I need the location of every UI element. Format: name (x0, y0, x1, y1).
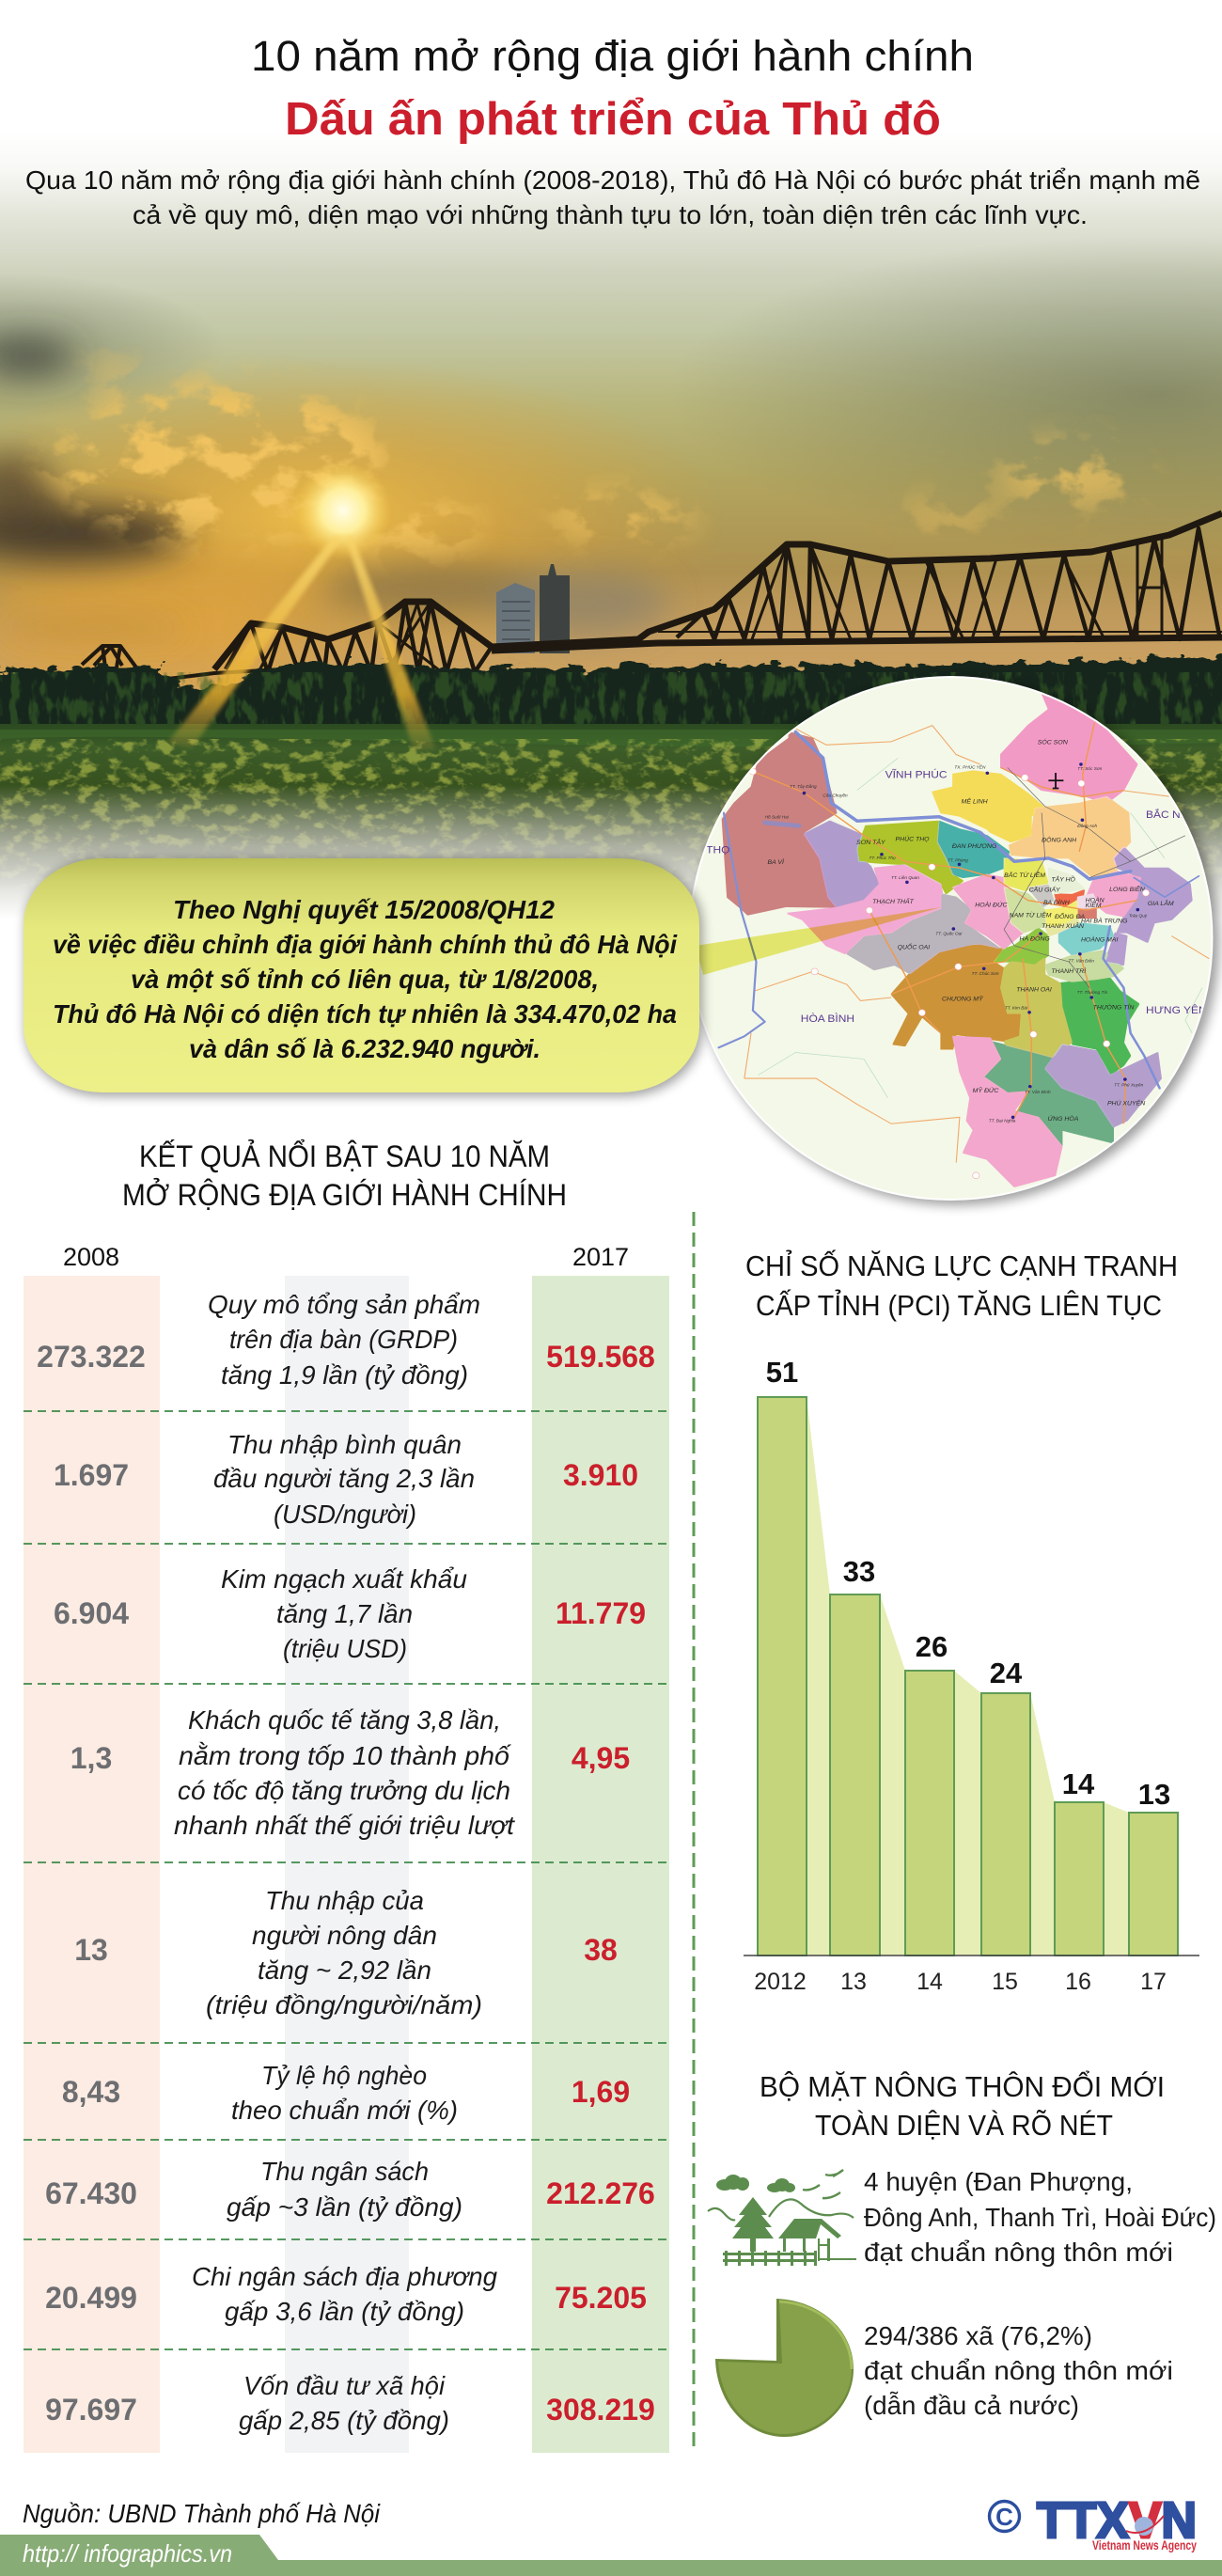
vegetation belt (0, 656, 1222, 735)
callout pointing at the map (24, 858, 941, 1096)
title line 1: 10 năm mở rộng địa giới hành chính (251, 32, 974, 80)
districts (722, 693, 1192, 1186)
district names: TÂY HỒ (1051, 874, 1076, 884)
row: budget revenue: Thu ngân sách (260, 2157, 429, 2186)
district names: THANH TRÌ (1051, 966, 1086, 975)
intro paragraph: cả về quy mô, diện mạo với những thành tựu to lớn, toàn diện trên các lĩnh vực. (133, 200, 1088, 229)
heading: new rural areas (760, 2069, 1165, 2142)
bar 2012 (754, 1356, 807, 1995)
road number badges (749, 768, 1150, 1179)
district names: Trâu Quỳ (1129, 914, 1148, 919)
province names (680, 769, 1207, 1025)
vertical dashed divider (692, 1212, 696, 2453)
district names: SƠN TÂY (856, 838, 885, 846)
row: international visitors: 4,95 (572, 1741, 630, 1775)
row: income per capita: (USD/người) (274, 1500, 416, 1529)
row: budget revenue: gấp ~3 lần (tỷ đồng) (227, 2192, 462, 2222)
district names: MỸ ĐỨC (973, 1086, 999, 1094)
row: farmer income (74, 1886, 618, 2019)
agency wordmark: TTXVN (1037, 2492, 1197, 2549)
centre band background (285, 1276, 409, 2453)
year header 2008: 2008 (63, 1243, 119, 1271)
callout text (53, 895, 678, 1063)
row: GRDP: tăng 1,9 lần (tỷ đồng) (221, 1360, 468, 1390)
row: international visitors (70, 1705, 630, 1840)
row: income per capita: 1.697 (54, 1458, 129, 1492)
bar 2012: 51 (766, 1356, 798, 1389)
row: international visitors: nằm trong tốp 10 thành phố (179, 1741, 511, 1770)
row: poverty rate (62, 2061, 630, 2125)
row: budget revenue: 67.430 (45, 2176, 137, 2210)
sun beams (167, 536, 436, 750)
district names: TT. Phúc Thọ (870, 856, 896, 860)
bar 2015: 24 (990, 1657, 1023, 1689)
bar 2015: 15 (992, 1969, 1018, 1995)
district names (765, 738, 1174, 1123)
row: exports: 11.779 (556, 1596, 646, 1630)
hero photo: sunset over Long Bien bridge (0, 132, 1222, 926)
province names: VĨNH PHÚC (885, 769, 948, 780)
row: farmer income: người nông dân (252, 1921, 437, 1950)
row: exports: (triệu USD) (283, 1634, 407, 1663)
district names: ĐAN PHƯỢNG (952, 843, 996, 850)
row: exports (54, 1564, 646, 1663)
column 2017 background (532, 1276, 669, 2453)
row: GRDP: 519.568 (546, 1340, 655, 1374)
bar 2013 (830, 1555, 880, 1995)
row: poverty rate: 1,69 (572, 2075, 630, 2109)
row: social investment: 308.219 (546, 2393, 655, 2427)
district names: ỨNG HÒA (1048, 1114, 1079, 1123)
row: farmer income: Thu nhập của (265, 1886, 424, 1915)
bar 2013: 33 (843, 1555, 875, 1588)
row: exports: 6.904 (54, 1596, 129, 1630)
row: local budget spending: 75.205 (555, 2281, 647, 2315)
text: 294 of 386 communes: (dẫn đầu cả nước) (864, 2391, 1079, 2420)
row: farmer income: tăng ~ 2,92 lần (258, 1956, 431, 1985)
footer url: http:// infographics.vn (23, 2539, 232, 2568)
heading: new rural areas: BỘ MẶT NÔNG THÔN ĐỔI MỚI (760, 2069, 1165, 2103)
district names: PHÚ XUYÊN (1107, 1098, 1145, 1107)
district names: TT. Phú Xuyên (1114, 1082, 1144, 1087)
row: poverty rate: theo chuẩn mới (%) (231, 2096, 458, 2125)
row: local budget spending (45, 2262, 647, 2326)
district names: TT. Thường Tín (1077, 990, 1108, 995)
heading: PCI chart: CẤP TỈNH (PCI) TĂNG LIÊN TỤC (756, 1289, 1162, 1322)
district names: BA VÌ (768, 857, 784, 866)
bar 2012: 2012 (754, 1969, 807, 1995)
row: poverty rate: Tỷ lệ hộ nghèo (261, 2061, 427, 2090)
row: income per capita: đầu người tăng 2,3 lần (213, 1464, 475, 1493)
heading: results after 10 years: KẾT QUẢ NỔI BẬT SAU 10 NĂM (139, 1139, 550, 1173)
year header 2017: 2017 (572, 1243, 629, 1271)
bar 2014: 14 (916, 1969, 943, 1995)
district names: TT. Chúc Sơn (972, 971, 999, 976)
district names: BẮC TỪ LIÊM (1004, 871, 1045, 879)
callout text: Thủ đô Hà Nội có diện tích tự nhiên là 334.470,02 ha (53, 999, 677, 1029)
row: income per capita: 3.910 (563, 1458, 638, 1492)
background roads (744, 726, 1209, 1163)
title (251, 32, 974, 145)
text: 294 of 386 communes: đạt chuẩn nông thôn mới (864, 2356, 1173, 2385)
airplane symbol (1048, 773, 1063, 788)
heading: results after 10 years: MỞ RỘNG ĐỊA GIỚI HÀNH CHÍNH (122, 1178, 567, 1212)
row: international visitors: 1,3 (70, 1741, 112, 1775)
row: GRDP: trên địa bàn (GRDP) (229, 1325, 458, 1354)
main roads (753, 722, 1137, 1123)
district names: MÊ LINH (962, 797, 988, 805)
district names: ĐỐNG ĐA (1055, 912, 1086, 920)
row: GRDP: Quy mô tổng sản phẩm (208, 1290, 480, 1319)
district names: HAI BÀ TRƯNG (1081, 917, 1128, 925)
bar 2017: 17 (1140, 1969, 1167, 1995)
district names: TX. PHÚC YÊN (954, 763, 986, 769)
district names: GIA LÂM (1148, 899, 1174, 907)
heading: PCI chart: CHỈ SỐ NĂNG LỰC CẠNH TRANH (745, 1249, 1178, 1282)
rivers (719, 732, 1198, 1088)
district names: NAM TỪ LIÊM (1010, 911, 1052, 919)
heading: results after 10 years (122, 1139, 567, 1212)
intro paragraph (25, 165, 1200, 229)
row: social investment: 97.697 (45, 2393, 137, 2427)
circular map of Hanoi (680, 672, 1222, 1208)
district town dots (803, 762, 1139, 1119)
bar 2013: 13 (840, 1969, 867, 1995)
icon: countryside landscape (708, 2170, 856, 2266)
copyright mark: C (995, 2503, 1013, 2531)
district names: TT. Tây Đằng (790, 783, 817, 789)
text: 4 districts (864, 2167, 1216, 2267)
district names: KIẾM (1086, 901, 1102, 909)
province names: BẮC NINH (1146, 809, 1199, 821)
district names: THƯỜNG TÍN (1093, 1003, 1134, 1012)
district names: ĐÔNG ANH (1042, 835, 1076, 843)
bar 2017 (1129, 1778, 1178, 1995)
distant skyscrapers (496, 564, 570, 653)
comparison table 2008 vs 2017 (24, 1243, 669, 2453)
row: exports: Kim ngạch xuất khẩu (221, 1564, 467, 1594)
row: income per capita: Thu nhập bình quân (227, 1430, 462, 1459)
text: 4 districts: 4 huyện (Đan Phượng, (864, 2167, 1133, 2196)
bar 2017: 13 (1138, 1778, 1170, 1811)
district names: TT. Liên Quan (891, 875, 919, 880)
row: social investment: gấp 2,85 (tỷ đồng) (239, 2406, 449, 2435)
row: farmer income: 38 (584, 1933, 618, 1967)
copyright mark (989, 2501, 1019, 2531)
bar 2016: 16 (1065, 1969, 1091, 1995)
district names: HÀ ĐÔNG (1020, 935, 1050, 943)
district names: HOÀN (1086, 896, 1104, 903)
text: 4 districts: đạt chuẩn nông thôn mới (864, 2238, 1173, 2267)
district names: Đông Anh (1077, 824, 1098, 828)
globe emblem (1126, 2516, 1164, 2536)
district names: PHÚC THỌ (896, 834, 930, 842)
row: budget revenue (45, 2157, 655, 2222)
district names: Hồ Suối Hai (765, 814, 790, 819)
row: poverty rate: 8,43 (62, 2075, 120, 2109)
callout text: Theo Nghị quyết 15/2008/QH12 (173, 895, 555, 924)
callout bubble (24, 858, 699, 1092)
callout pointer (696, 907, 941, 975)
row: income per capita (54, 1430, 638, 1529)
province names: PHÚ THỌ (680, 844, 729, 856)
callout text: về việc điều chỉnh địa giới hành chính thủ đô Hà Nội (53, 930, 678, 959)
district names: QUỐC OAI (898, 943, 930, 951)
logo: TTXVN (989, 2492, 1197, 2552)
row: farmer income: 13 (74, 1933, 108, 1967)
district names: CHƯƠNG MỸ (942, 995, 983, 1002)
row: exports: tăng 1,7 lần (276, 1599, 413, 1628)
district names: TT. Kim Bài (1005, 1006, 1028, 1011)
row: social investment: Vốn đầu tư xã hội (243, 2371, 446, 2400)
district names: BA ĐÌNH (1043, 898, 1070, 906)
row: GRDP: 273.322 (37, 1340, 146, 1374)
text: 294 of 386 communes: 294/386 xã (76,2%) (864, 2321, 1092, 2350)
district names: THẠCH THẤT (872, 897, 915, 905)
source note: Nguồn: UBND Thành phố Hà Nội (23, 2499, 381, 2528)
bar 2014: 26 (916, 1630, 948, 1663)
row: local budget spending: gấp 3,6 lần (tỷ đồng) (225, 2297, 464, 2326)
row: local budget spending: 20.499 (45, 2281, 137, 2315)
callout text: và một số tỉnh có liên qua, từ 1/8/2008, (131, 965, 599, 994)
district names: TT. Quốc Oai (935, 931, 963, 935)
district names: TT. Vân Đình (1025, 1090, 1051, 1094)
row: international visitors: nhanh nhất thế giới triệu lượt (174, 1811, 515, 1840)
district names: TT. Phùng (948, 857, 968, 862)
district names: THANH XUÂN (1042, 921, 1084, 930)
column 2008 background (24, 1276, 160, 2453)
footer bar (0, 2535, 1222, 2576)
callout shadow (25, 859, 702, 1096)
text: 294 of 386 communes (864, 2321, 1173, 2420)
intro paragraph: Qua 10 năm mở rộng địa giới hành chính (2008-2018), Thủ đô Hà Nội có bước phát triển mạnh mẽ (25, 165, 1200, 195)
heading: PCI chart (745, 1249, 1178, 1322)
district names: SÓC SƠN (1038, 738, 1068, 746)
heading: new rural areas: TOÀN DIỆN VÀ RÕ NÉT (815, 2109, 1113, 2142)
district names: HOÀNG MAI (1081, 935, 1119, 944)
district names: HOÀI ĐỨC (975, 901, 1008, 908)
bar 2016 (1055, 1767, 1104, 1995)
district names: CẦU GIẤY (1029, 885, 1060, 894)
row: farmer income: (triệu đồng/người/năm) (206, 1990, 482, 2019)
row: international visitors: Khách quốc tế tăng 3,8 lần, (188, 1705, 501, 1735)
row: GRDP (37, 1290, 655, 1390)
bar 2014 (905, 1630, 954, 1995)
district names: LONG BIÊN (1109, 885, 1145, 893)
district names: Cầu Chuyền (822, 793, 848, 797)
bar 2016: 14 (1062, 1767, 1095, 1800)
bar 2015 (981, 1657, 1030, 1995)
bridge silhouette (82, 513, 1222, 679)
icon: pie chart 76.2% (715, 2299, 854, 2437)
row: social investment (45, 2371, 655, 2435)
row: budget revenue: 212.276 (546, 2176, 655, 2210)
district names: THANH OAI (1016, 987, 1052, 994)
row: international visitors: có tốc độ tăng trưởng du lịch (178, 1776, 510, 1805)
bar chart: PCI ranking 2012-2017 (744, 1356, 1199, 1995)
row: local budget spending: Chi ngân sách địa phương (192, 2262, 497, 2291)
callout text: và dân số là 6.232.940 người. (189, 1034, 540, 1063)
province names: HÒA BÌNH (801, 1013, 854, 1025)
district names: TT. Sóc Sơn (1077, 766, 1103, 771)
district names: TT. Văn Điển (1069, 958, 1094, 963)
title line 2: Dấu ấn phát triển của Thủ đô (285, 94, 941, 145)
province names: HƯNG YÊN (1146, 1004, 1207, 1016)
district names: TT. Đại Nghĩa (989, 1119, 1016, 1123)
